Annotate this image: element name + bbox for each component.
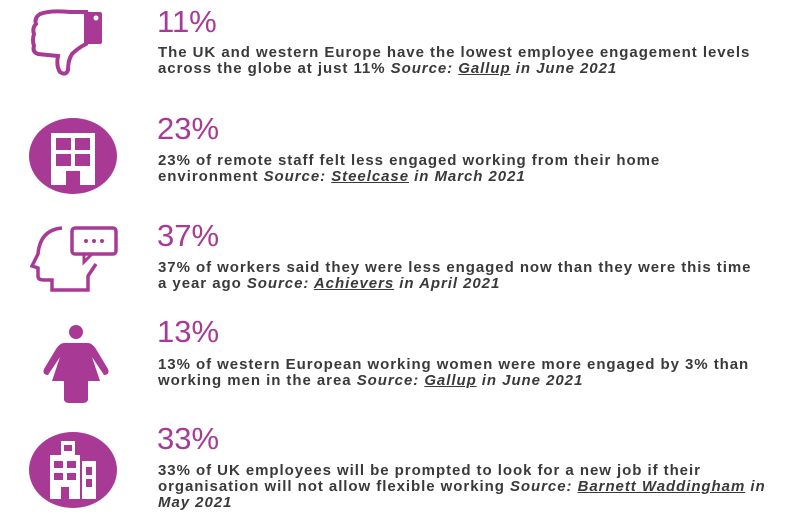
icon: woman — [44, 325, 108, 403]
text: 23% description: 23% of remote staff felt less engaged working from their home — [158, 152, 660, 169]
icon: city buildings circle — [29, 432, 117, 508]
text: 13% description: working men in the area Source: Gallup in June 2021 — [158, 372, 583, 389]
icon: thumbs down — [31, 9, 102, 76]
text: 37% description: 37% of workers said they were less engaged now than they were this time — [158, 259, 751, 276]
stat: 11%: 11% — [157, 4, 217, 39]
text: 23% description — [158, 152, 660, 185]
stat: 23%: 23% — [157, 111, 219, 146]
text: 23% description: environment Source: Steelcase in March 2021 — [158, 168, 526, 185]
text: 11% description — [158, 44, 750, 77]
text: 33% description — [158, 462, 766, 511]
text: 13% description — [158, 356, 749, 389]
text: 33% description: 33% of UK employees will be prompted to look for a new job if their — [158, 462, 701, 479]
icon: head with speech bubble — [30, 226, 118, 292]
text: 37% description: a year ago Source: Achievers in April 2021 — [158, 275, 500, 292]
stat: 13%: 13% — [157, 314, 219, 349]
text: 11% description: The UK and western Europe have the lowest employee engagement levels — [158, 44, 750, 61]
stat: 37%: 37% — [157, 218, 219, 253]
text: 13% description: 13% of western European working women were more engaged by 3% than — [158, 356, 749, 373]
stat: 33%: 33% — [157, 421, 219, 456]
text: 33% description: May 2021 — [158, 494, 232, 511]
text: 33% description: organisation will not allow flexible working Source: Barnett Waddingham in — [158, 478, 766, 495]
text: 37% description — [158, 259, 751, 292]
text: 11% description: across the globe at just 11% Source: Gallup in June 2021 — [158, 60, 617, 77]
icon: office building circle — [29, 118, 117, 194]
